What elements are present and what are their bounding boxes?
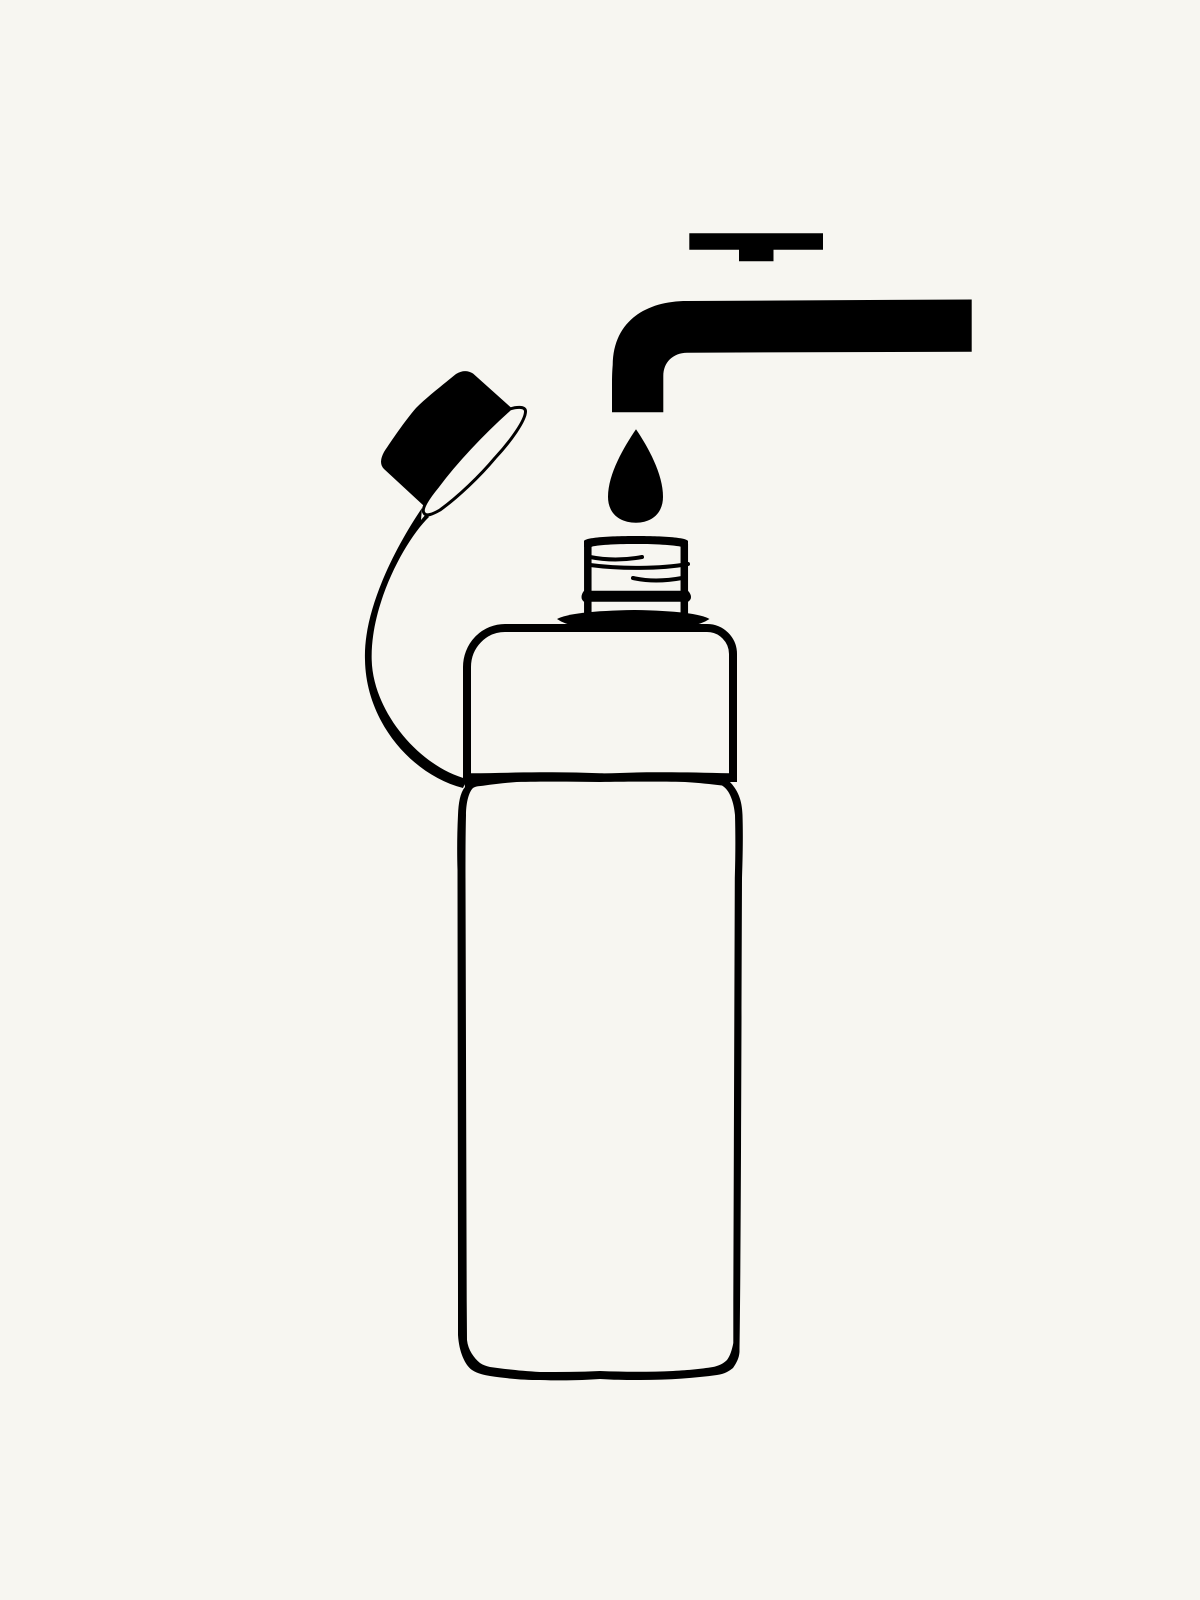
bottle shoulder bbox=[467, 628, 733, 782]
cap tether bbox=[365, 508, 467, 788]
cap body bbox=[381, 371, 516, 506]
cap opening bbox=[423, 407, 526, 515]
tap handle bbox=[689, 233, 823, 261]
tap spout bbox=[612, 300, 972, 412]
icon: water drop bbox=[608, 429, 663, 523]
neck collar band bbox=[582, 591, 691, 602]
bottle cap with tether bbox=[365, 371, 526, 788]
neck rim top bbox=[584, 536, 688, 547]
icon: tap bbox=[612, 233, 972, 412]
bottle body bbox=[457, 772, 743, 1380]
neck flange bbox=[557, 610, 710, 626]
neck walls bbox=[588, 544, 684, 614]
bottle neck bbox=[557, 536, 710, 626]
neck threads bbox=[590, 557, 688, 580]
